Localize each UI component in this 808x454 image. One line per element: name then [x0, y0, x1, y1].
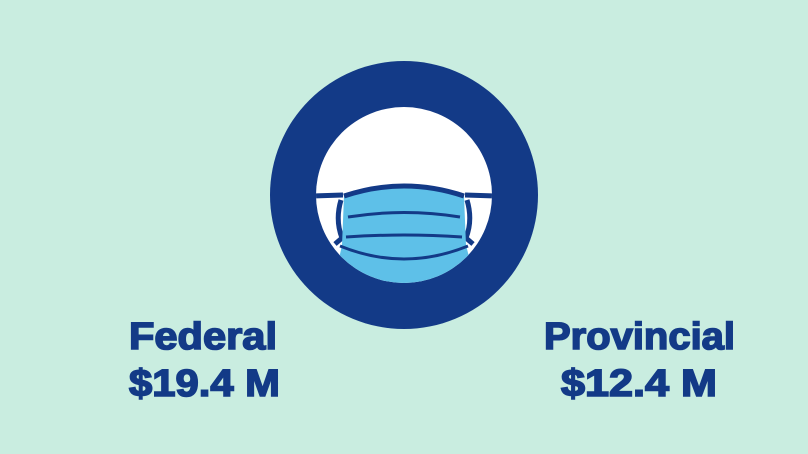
mask body [340, 188, 468, 283]
label: federal [129, 316, 280, 405]
label: federal: Federal [129, 316, 277, 358]
icon: mask in circle [270, 61, 538, 329]
label: federal: $19.4 M [129, 363, 280, 405]
label: provincial: Provincial [544, 316, 735, 358]
label: provincial: $12.4 M [561, 363, 717, 405]
label: provincial [544, 316, 735, 405]
ear straps [312, 195, 496, 196]
